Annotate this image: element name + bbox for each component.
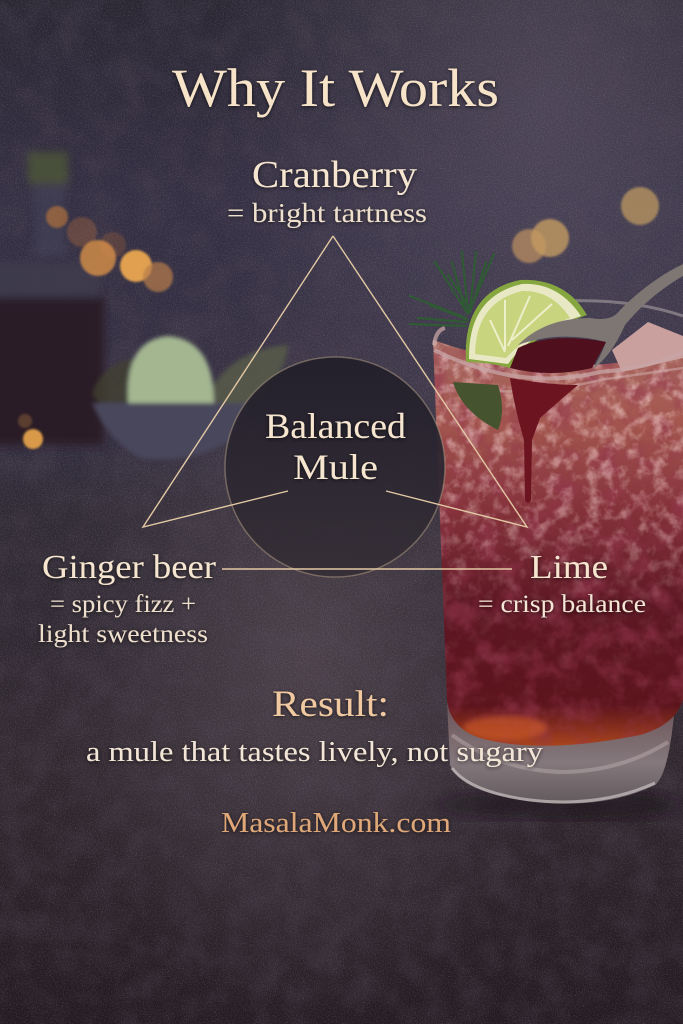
- glass back rim: [560, 301, 683, 316]
- label: ginger beer: = spicy fizz +: [50, 591, 196, 618]
- bokeh lights left: [18, 206, 173, 449]
- label: cranberry: [227, 154, 427, 228]
- label: balanced mule: [265, 406, 406, 487]
- website credit: MasalaMonk.com: [221, 807, 451, 839]
- label: ginger beer: Ginger beer: [42, 549, 217, 586]
- lime slice: [466, 280, 587, 368]
- glass front rim: [434, 328, 683, 378]
- label: lime: = crisp balance: [478, 591, 646, 618]
- label: ginger beer: light sweetness: [38, 621, 208, 648]
- bokeh lights right: [512, 187, 659, 263]
- title: Why It Works: [172, 58, 499, 118]
- label: ginger beer: [38, 549, 217, 648]
- cocktail glass: [410, 252, 683, 819]
- lime wedge inside glass: [453, 382, 502, 430]
- label: balanced mule: Mule: [293, 447, 378, 487]
- rosemary sprig: [410, 252, 494, 326]
- result heading: Result:: [272, 684, 389, 725]
- blurred background bottle: [0, 152, 104, 445]
- ice above rim: [612, 322, 683, 372]
- central circle: [225, 357, 445, 577]
- blurred lime bowl: [92, 336, 288, 460]
- cranberry drip: [510, 378, 578, 503]
- spoon: [510, 264, 683, 373]
- label: balanced mule: Balanced: [265, 406, 406, 446]
- triangle with connector lines: [143, 236, 527, 569]
- label: cranberry: Cranberry: [252, 154, 417, 196]
- label: lime: Lime: [530, 549, 608, 586]
- label: lime: [478, 549, 646, 618]
- drink body: [433, 340, 683, 746]
- result text: a mule that tastes lively, not sugary: [86, 737, 544, 768]
- glass base: [447, 700, 674, 804]
- label: cranberry: = bright tartness: [227, 197, 427, 228]
